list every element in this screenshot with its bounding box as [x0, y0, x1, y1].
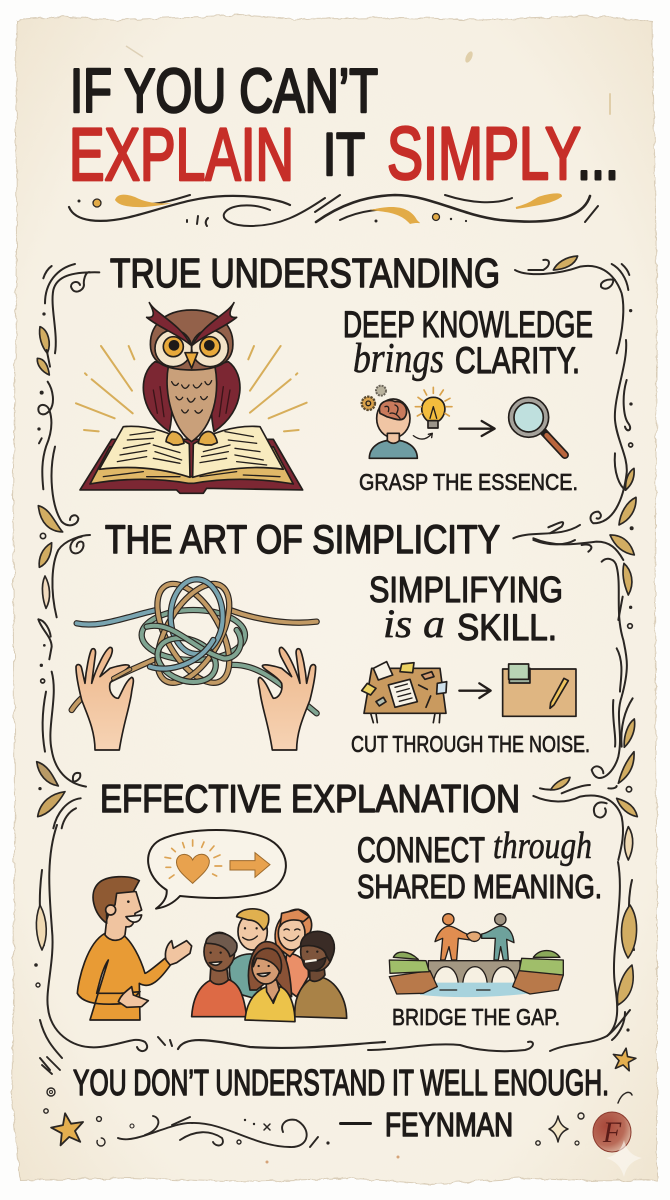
illustration: owl on open book with rays [76, 303, 307, 493]
frame: right ornament, middle section [533, 540, 637, 860]
title: IF YOU CAN’T [70, 57, 378, 126]
icon: person thinking, idea bulb, arrow and magnifier [362, 386, 565, 458]
icon: sparkle [549, 1116, 568, 1142]
text: connect through shared meaning [357, 825, 602, 905]
text: connect through shared meaning: CONNECT [357, 831, 485, 870]
text: deep knowledge brings clarity [343, 304, 593, 382]
title: EXPLAIN [69, 113, 294, 196]
title: SIMPLY [387, 112, 581, 195]
caption: bridge the gap: BRIDGE THE GAP. [392, 1004, 560, 1030]
decorative white sparkle watermark [606, 1140, 642, 1177]
seal with letter F: F [602, 1116, 622, 1149]
illustration: hands untangling a rope knot [72, 572, 317, 750]
attribution: feynman [339, 1106, 513, 1143]
title [69, 57, 619, 196]
heading: the art of simplicity: THE ART OF SIMPLICITY [105, 518, 500, 562]
section 2 panel: the art of simplicity [72, 518, 590, 757]
attribution: feynman: FEYNMAN [385, 1106, 513, 1143]
text: simplifying is a skill: is a [383, 601, 445, 646]
illustration: speaker with speech bubble and audience [77, 830, 347, 1022]
icon: gold star right [611, 1046, 637, 1072]
frame: left ornament, top section [37, 264, 99, 539]
frame: right ornament, top section [513, 256, 636, 560]
title: IT [323, 121, 365, 188]
icon: gold star left [49, 1110, 86, 1146]
icon: two figures shaking hands on a bridge [389, 914, 563, 997]
heading: effective explanation: EFFECTIVE EXPLANATION [100, 778, 520, 821]
text: deep knowledge brings clarity: CLARITY. [455, 340, 580, 381]
icon: messy desk, arrow and clean desk [362, 662, 576, 723]
text: deep knowledge brings clarity: brings [353, 336, 444, 382]
caption: cut through the noise: CUT THROUGH THE NOISE. [351, 731, 590, 757]
title: ... [577, 116, 619, 194]
frame: left ornament, middle section [37, 535, 90, 828]
text: connect through shared meaning: through [493, 825, 592, 867]
frame: lower section and bottom flourish [34, 825, 637, 1070]
text: simplifying is a skill [369, 569, 563, 648]
heading: true understanding: TRUE UNDERSTANDING [110, 250, 500, 296]
section 3 panel: effective explanation [77, 778, 602, 1030]
caption: grasp the essence: GRASP THE ESSENCE. [359, 469, 578, 495]
section 1 panel: true understanding [76, 250, 593, 495]
paper specks [126, 46, 611, 1164]
text: connect through shared meaning: SHARED MEANING. [357, 868, 602, 905]
seal with letter F [593, 1112, 631, 1152]
text: simplifying is a skill: SIMPLIFYING [369, 569, 563, 610]
footer ornament: swirls and dots [42, 1057, 632, 1147]
text: simplifying is a skill: SKILL. [457, 607, 557, 648]
title flourish [69, 194, 598, 226]
